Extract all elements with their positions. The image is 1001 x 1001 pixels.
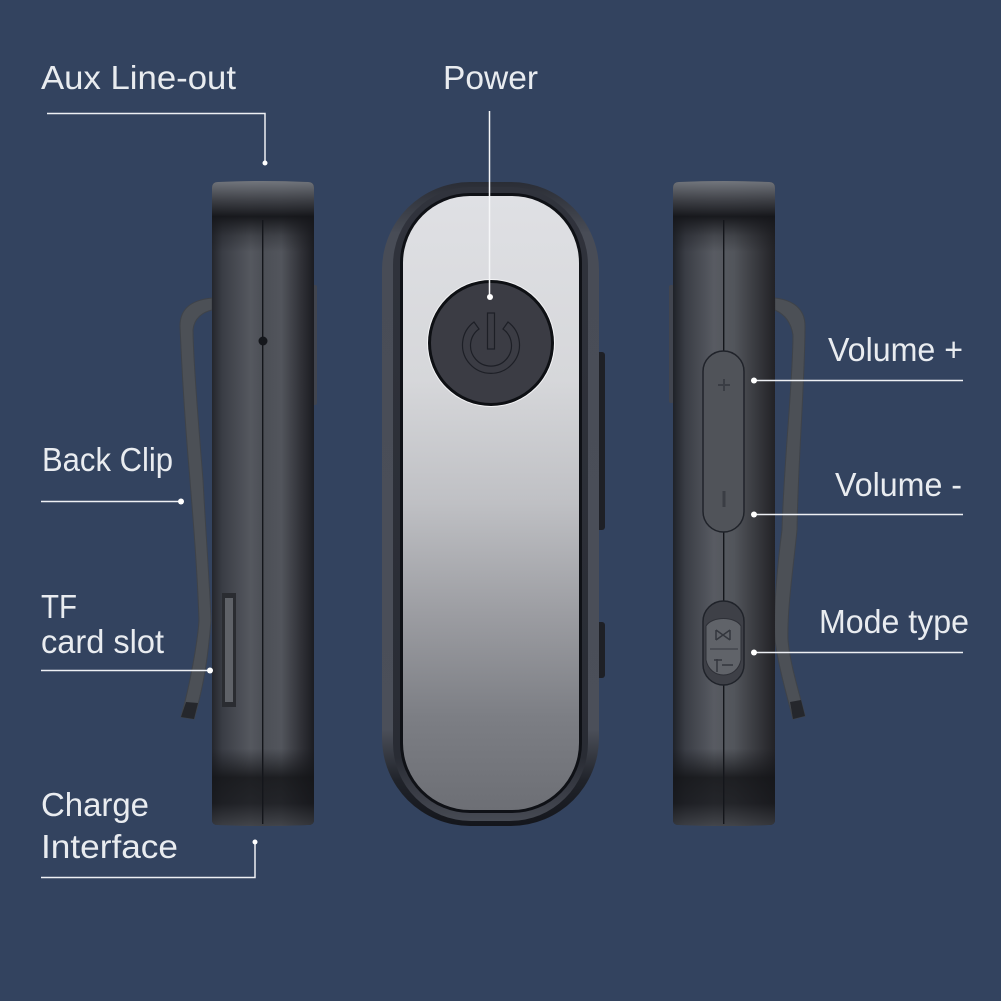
callout: Aux Line-out [41, 59, 268, 166]
side buttons [596, 352, 605, 530]
body [212, 181, 314, 826]
side button bump [312, 285, 317, 405]
icon: power symbol [462, 313, 519, 373]
callout: Back Clip [41, 441, 184, 504]
callout: Power: Power [443, 59, 538, 96]
clip tip [790, 700, 805, 719]
mirror face [403, 196, 579, 810]
back clip (right view) [775, 298, 805, 719]
outer shell [382, 182, 599, 826]
volume rocker [703, 351, 744, 532]
callout: Volume -: Volume - [835, 466, 962, 503]
callout: TF card slot [41, 588, 213, 674]
callout: Volume + [751, 331, 963, 384]
callout: TF card slot: TF [41, 588, 77, 625]
TF card slot [222, 593, 236, 707]
center front view of device [382, 182, 605, 826]
inner rim [393, 187, 588, 821]
callout: Aux Line-out: Aux Line-out [41, 59, 236, 96]
body shading [212, 181, 314, 826]
left side view of device [180, 181, 317, 826]
black border [400, 193, 582, 813]
callout: TF card slot: card slot [41, 623, 164, 660]
mode switch [703, 601, 744, 685]
microphone hole [258, 336, 268, 346]
mode icon top [716, 630, 730, 640]
clip tip [181, 702, 198, 719]
callout: Charge Interface [41, 786, 258, 878]
callout: Charge Interface: Charge [41, 786, 149, 823]
back clip (left view) [180, 298, 212, 719]
callout: Volume - [751, 466, 963, 518]
callout: Charge Interface: Interface [41, 828, 178, 865]
mode divider [710, 648, 738, 650]
callout: Mode type [751, 603, 969, 656]
callout: Mode type: Mode type [819, 603, 969, 640]
plus mark [718, 379, 730, 391]
callout: Volume +: Volume + [828, 331, 963, 368]
minus mark [722, 491, 726, 507]
side button bump [669, 285, 674, 403]
seam [723, 220, 724, 824]
power button [427, 279, 555, 407]
body shading [673, 181, 775, 826]
body [673, 181, 775, 826]
seam [262, 220, 263, 824]
callout: Power [443, 59, 538, 300]
mode icon bottom [714, 659, 733, 672]
callout: Back Clip: Back Clip [42, 441, 173, 478]
right side view of device [669, 181, 805, 826]
